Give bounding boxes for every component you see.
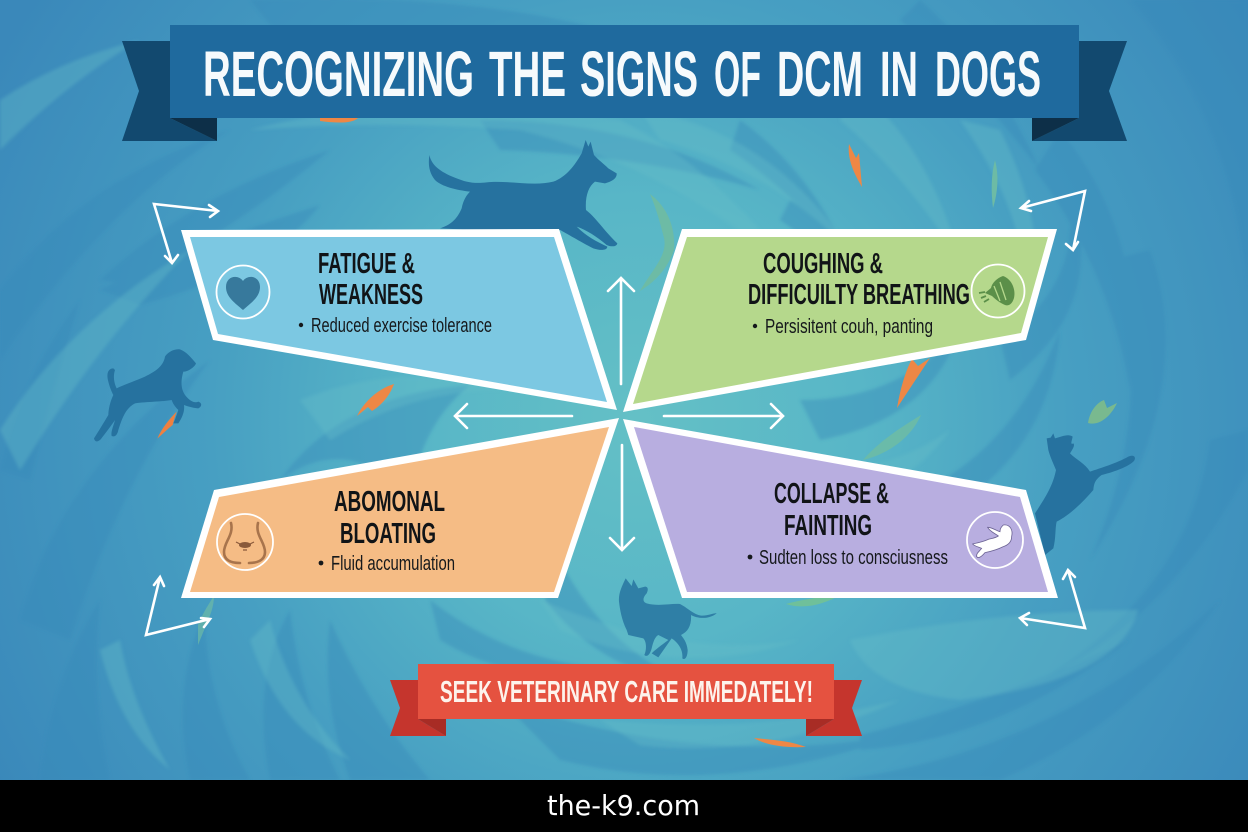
title text: RECOGNIZING [203, 38, 474, 110]
footer bar [0, 780, 1248, 832]
arrow: centre right [664, 404, 783, 428]
panel heading: DIFFICUILTY BREATHING [748, 279, 970, 311]
arrow: centre down [610, 445, 634, 550]
arrow: top left corner [154, 204, 218, 263]
icon: cough [972, 264, 1024, 318]
panel heading: BLOATING [340, 518, 436, 550]
icon: heart [216, 266, 270, 318]
title banner [122, 25, 1127, 141]
panel heading: FAINTING [784, 510, 872, 542]
title text: DCM [777, 38, 863, 110]
panel heading [318, 248, 423, 311]
panel bullet text: Fluid accumulation [331, 553, 455, 575]
panel bullet text [319, 553, 455, 575]
dog silhouette: top running dog [429, 140, 617, 250]
title text [203, 38, 1041, 110]
callout text: SEEK VETERINARY CARE IMMEDATELY! [440, 674, 813, 709]
title text: OF [714, 38, 761, 110]
panel bullet text: Reduced exercise tolerance [311, 315, 492, 337]
icon: abdomen [217, 514, 273, 570]
panel bullet text: Persisitent couh, panting [765, 316, 933, 338]
panel heading [774, 478, 889, 542]
title text: IN [880, 38, 918, 110]
title text: SIGNS [580, 38, 698, 110]
panel: coughing and difficulty breathing [623, 229, 1057, 412]
panel heading: WEAKNESS [319, 279, 423, 311]
footer text: the-k9.com [547, 789, 700, 822]
panel: fatigue and weakness [181, 229, 617, 410]
arrow: bottom right corner [1020, 570, 1085, 628]
panel bullet text: Sudten loss to consciusness [759, 547, 948, 569]
dog silhouette: left jumping dog [94, 349, 201, 441]
decorative green leaves [198, 160, 1117, 645]
arrow: bottom left corner [146, 577, 210, 635]
arrow: centre up [608, 278, 634, 384]
panel: collapse and fainting [623, 419, 1058, 598]
panel bullet text [299, 315, 492, 337]
panel heading: FATIGUE & [318, 248, 415, 280]
decorative orange leaves [320, 118, 930, 747]
panel heading: COLLAPSE & [774, 478, 889, 510]
title text: THE [489, 38, 566, 110]
panel heading [334, 486, 445, 550]
arrow: centre left [455, 404, 572, 428]
title text: DOGS [935, 38, 1041, 110]
icon: collapsed dog [967, 512, 1023, 568]
dog silhouette: bottom standing dog [619, 578, 717, 659]
panel heading: ABOMONAL [334, 486, 445, 518]
panel heading [748, 248, 970, 311]
panel heading: COUGHING & [763, 248, 883, 280]
panel: abdominal bloating [181, 418, 619, 598]
dog silhouette: right leaping dog [1035, 433, 1135, 555]
callout banner [390, 664, 862, 736]
arrow: top right corner [1021, 191, 1085, 250]
